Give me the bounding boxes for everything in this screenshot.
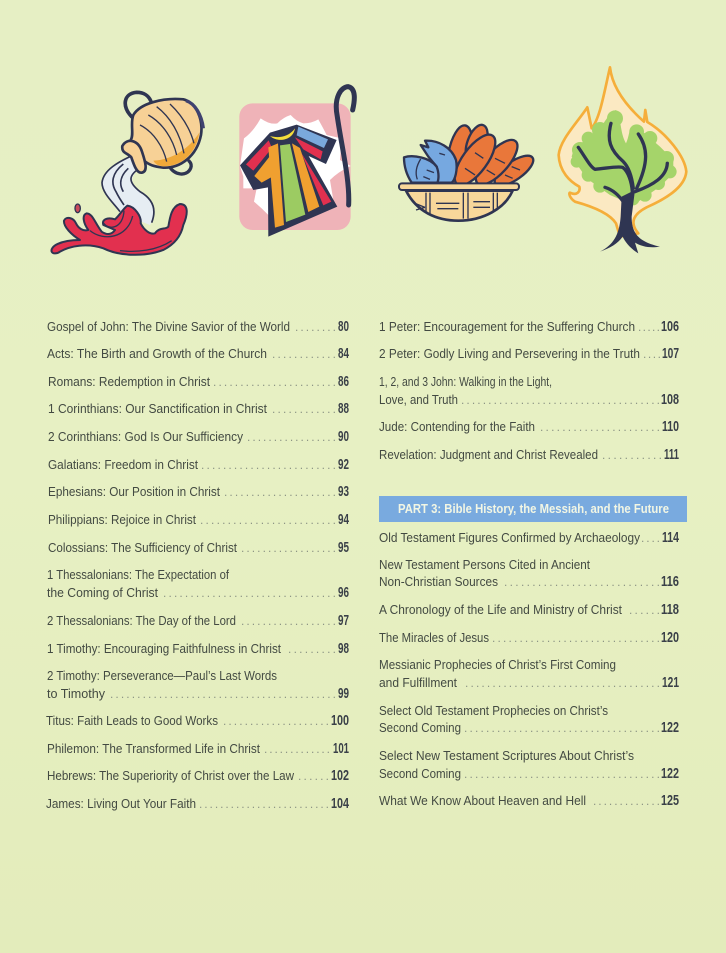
entry: Acts: ............ — [272, 347, 336, 361]
entry: New Testament Persons: Non-Christian Sources — [379, 574, 498, 589]
entry: 1 Peter: ..... — [638, 320, 660, 334]
icon: water jar pouring wine — [51, 92, 203, 255]
entry: Ephesians: Ephesians: Our Position in Christ — [48, 484, 220, 499]
entry: New Testament Persons: New Testament Persons Cited in Ancient — [379, 557, 590, 572]
entry: Old Testament Figures: Old Testament Figures Confirmed by Archaeology — [379, 530, 640, 545]
entry: Messianic Prophecies: Messianic Prophecies of Christ’s First Coming — [379, 657, 616, 672]
entry: Jude: ...................... — [540, 420, 660, 434]
pink tile — [239, 103, 351, 230]
icon: burning bush tree — [559, 67, 686, 253]
entry: 2 Thessalonians: 97 — [338, 613, 349, 629]
icon: coat of many colors with shepherd staff — [239, 87, 354, 237]
entry: James — [46, 796, 349, 812]
entry: Romans — [48, 374, 349, 390]
entry: Galatians: 92 — [338, 457, 349, 473]
entry: 1 Peter: 1 Peter: Encouragement for the Suffering Church — [379, 319, 635, 334]
entry: Chronology: ...... — [629, 603, 660, 617]
entry: Select New Testament: Second Coming — [379, 766, 461, 781]
entry: 1 Timothy: 1 Timothy: Encouraging Faithfulness in Christ — [47, 641, 281, 656]
entry: 1, 2, and 3 John: Love, and Truth — [379, 392, 458, 407]
entry: Revelation: 111 — [664, 447, 679, 463]
entry: Hebrews: 102 — [331, 768, 349, 784]
icon: basket of fish and loaves — [399, 122, 538, 221]
entry: 2 Peter: 107 — [662, 346, 679, 362]
entry: 1 Timothy: 98 — [338, 641, 349, 657]
entry: Acts: Acts: The Birth and Growth of the Church — [47, 346, 267, 361]
entry: Philemon: ............. — [264, 742, 330, 756]
entry: Galatians — [48, 457, 349, 473]
entry: Ephesians — [48, 484, 349, 500]
entry: Revelation: ........... — [602, 448, 662, 462]
robe — [240, 125, 337, 237]
entry: Titus: .................... — [223, 714, 329, 728]
entry: Colossians — [48, 540, 349, 556]
loaves — [443, 122, 538, 192]
flame — [559, 67, 686, 237]
entry: Galatians: ......................... — [201, 458, 336, 472]
shepherd staff — [336, 87, 354, 205]
entry: Gospel of John: Gospel of John: The Divine Savior of the World — [47, 319, 290, 334]
entry: 1, 2, and 3 John: 1, 2, and 3 John: Walking in the Light, — [379, 374, 552, 389]
entry: 1 Thessalonians: ................................ — [163, 586, 336, 600]
heading: Part 3 banner: PART 3: Bible History, the Messiah, and the Future — [398, 501, 669, 516]
entry: Titus: Titus: Faith Leads to Good Works — [46, 713, 218, 728]
entry: 2 Timothy: .......................................... — [110, 687, 336, 701]
water stream — [102, 153, 154, 225]
entry: 1, 2, and 3 John: ..................................... — [461, 393, 660, 407]
entry: Jude: 110 — [662, 419, 679, 435]
entry: Romans: ....................... — [213, 375, 336, 389]
fish — [404, 141, 457, 183]
entry: 2 Thessalonians: .................. — [241, 614, 336, 628]
entry: Select Old Testament: Second Coming — [379, 720, 461, 735]
entry: Ephesians: ..................... — [224, 485, 336, 499]
table of contents: left column — [46, 319, 349, 812]
entry: 2 Timothy — [47, 668, 349, 702]
foliage — [571, 110, 677, 205]
entry: 1 Corinthians: 1 Corinthians: Our Sanctification in Christ — [48, 401, 267, 416]
entry: James: 104 — [331, 796, 349, 812]
entry: Philemon: 101 — [333, 741, 349, 757]
entry: 2 Thessalonians: 2 Thessalonians: The Day of the Lord — [47, 613, 236, 628]
table of contents: right column part 3 — [379, 530, 679, 809]
entry: Miracles — [379, 630, 679, 646]
entry: Miracles: 120 — [661, 630, 679, 646]
entry: Gospel of John: ........ — [295, 320, 336, 334]
entry: 1, 2, and 3 John — [379, 374, 679, 408]
entry: Colossians: 95 — [338, 540, 349, 556]
entry: Ephesians: 93 — [338, 484, 349, 500]
entry: Gospel of John: 80 — [338, 319, 349, 335]
entry: Heaven and Hell: ............. — [593, 794, 660, 808]
white burst — [240, 115, 351, 217]
entry: 1 Corinthians: 88 — [338, 401, 349, 417]
entry: 1 Peter: 106 — [661, 319, 679, 335]
entry: Miracles: ............................... — [492, 631, 660, 645]
entry: Heaven and Hell: 125 — [661, 793, 679, 809]
entry: 1 Thessalonians: 96 — [338, 585, 349, 601]
entry: New Testament Persons — [379, 557, 679, 590]
entry: Philippians: ......................... — [200, 513, 336, 527]
entry: 2 Corinthians — [48, 429, 349, 445]
entry: Jude: Jude: Contending for the Faith — [379, 419, 535, 434]
entry: Chronology: A Chronology of the Life and Ministry of Christ — [379, 602, 622, 617]
entry: Revelation: Revelation: Judgment and Christ Revealed — [379, 447, 598, 462]
entry: 1, 2, and 3 John: 108 — [661, 392, 679, 408]
entry: New Testament Persons: ............................ — [504, 575, 660, 589]
entry: Old Testament Figures: .... — [641, 531, 660, 545]
entry: Miracles: The Miracles of Jesus — [379, 630, 489, 645]
entry: Philippians: 94 — [338, 512, 349, 528]
entry: 2 Corinthians: 2 Corinthians: God Is Our Sufficiency — [48, 429, 243, 444]
entry: 1 Thessalonians: 1 Thessalonians: The Expectation of — [47, 567, 229, 582]
entry: 2 Timothy: 99 — [338, 686, 349, 702]
entry: Select Old Testament — [379, 703, 679, 736]
entry: 2 Peter: 2 Peter: Godly Living and Persevering in the Truth — [379, 346, 640, 361]
basket — [406, 191, 513, 221]
entry: Select New Testament: Select New Testament Scriptures About Christ’s — [379, 748, 634, 763]
entry: Philippians — [48, 512, 349, 528]
table of contents: right column top — [379, 319, 679, 463]
entry: Messianic Prophecies — [379, 657, 679, 691]
entry: 2 Timothy: 2 Timothy: Perseverance—Paul’s Last Words — [47, 668, 277, 683]
entry: Messianic Prophecies: and Fulfillment — [379, 675, 457, 690]
entry: James: James: Living Out Your Faith — [46, 796, 196, 811]
entry: Jude — [379, 419, 679, 435]
entry: Colossians: .................. — [241, 541, 336, 555]
entry: Titus — [46, 713, 349, 729]
entry: 2 Corinthians: 90 — [338, 429, 349, 445]
entry: Chronology: 118 — [661, 602, 679, 618]
entry: 1 Corinthians: ............ — [272, 402, 336, 416]
entry: James: ......................... — [199, 797, 329, 811]
entry: 1 Timothy: ......... — [288, 642, 336, 656]
heading: Part 3 banner — [379, 496, 687, 522]
entry: Romans: 86 — [338, 374, 349, 390]
entry: Messianic Prophecies: .................................... — [465, 676, 660, 690]
entry: Old Testament Figures: 114 — [662, 530, 679, 546]
entry: Select Old Testament: 122 — [661, 720, 679, 736]
entry: Messianic Prophecies: 121 — [662, 675, 679, 691]
entry: Galatians: Galatians: Freedom in Christ — [48, 457, 198, 472]
entry: Heaven and Hell: What We Know About Heaven and Hell — [379, 793, 586, 808]
entry: Titus: 100 — [331, 713, 349, 729]
entry: Philemon: Philemon: The Transformed Life in Christ — [47, 741, 260, 756]
entry: Select Old Testament: .................................... — [464, 721, 660, 735]
entry: 2 Timothy: to Timothy — [47, 686, 105, 701]
entry: Select New Testament: 122 — [661, 766, 679, 782]
entry: New Testament Persons: 116 — [661, 574, 679, 590]
entry: Romans: Romans: Redemption in Christ — [48, 374, 210, 389]
entry: Hebrews: Hebrews: The Superiority of Christ over the Law — [47, 768, 294, 783]
entry: 1 Thessalonians — [47, 567, 349, 601]
wine splash — [51, 204, 187, 255]
entry: 2 Thessalonians — [47, 613, 349, 629]
entry: Hebrews: ...... — [298, 769, 329, 783]
entry: Select New Testament: .................................... — [464, 767, 660, 781]
entry: Select New Testament — [379, 748, 679, 782]
entry: Colossians: Colossians: The Sufficiency of Christ — [48, 540, 237, 555]
entry: Select Old Testament: Select Old Testament Prophecies on Christ’s — [379, 703, 608, 718]
entry: 1 Thessalonians: the Coming of Christ — [47, 585, 158, 600]
trunk and branches — [600, 190, 660, 253]
entry: Acts: 84 — [338, 346, 349, 362]
entry: Philippians: Philippians: Rejoice in Christ — [48, 512, 196, 527]
entry: 2 Peter: .... — [643, 347, 661, 361]
entry: 2 Corinthians: ................. — [247, 430, 336, 444]
